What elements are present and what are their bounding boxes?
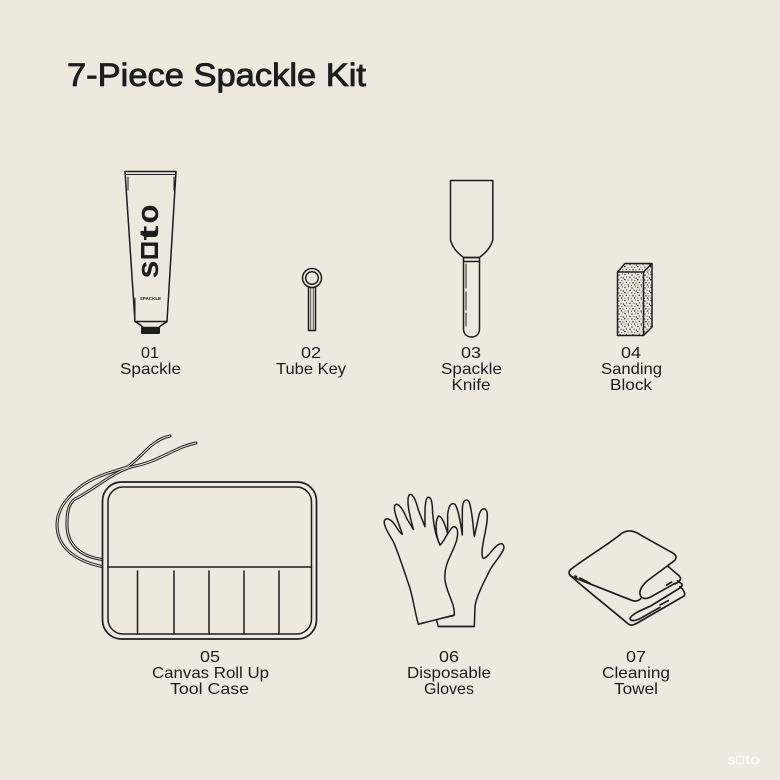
towel bottom layer [570, 575, 685, 625]
caption 05 [152, 649, 269, 698]
case pocket line [108, 566, 312, 568]
caption 05: Tool Case [170, 681, 249, 698]
case pocket dividers [138, 571, 279, 634]
caption 05: Canvas Roll Up [152, 665, 269, 682]
caption 05: 05 [200, 649, 220, 666]
caption 02: 02 [301, 345, 321, 362]
thumb of right glove [436, 516, 448, 545]
case body [102, 482, 316, 639]
caption 03: Spackle [441, 361, 502, 378]
caption 02 [276, 345, 346, 378]
caption 07 [602, 649, 670, 698]
caption 06: Disposable [407, 665, 491, 682]
caption 03: Knife [452, 377, 491, 394]
footer logo [728, 752, 760, 767]
caption 06: 06 [439, 649, 459, 666]
icon: spackle knife [450, 180, 493, 337]
icon: tool case [57, 436, 316, 639]
tube small label: SPACKLE [140, 296, 161, 301]
icon: sanding block [618, 264, 652, 336]
tube logo: t [134, 226, 164, 240]
item 01: spackle [120, 172, 181, 378]
towel top flap [570, 531, 676, 598]
left glove [384, 494, 458, 624]
item 03: spackle knife [441, 180, 502, 394]
tube logo: o [130, 204, 165, 224]
footer logo: to [745, 752, 760, 767]
item 04: sanding block [601, 264, 662, 394]
item 06: disposable gloves [384, 494, 504, 698]
caption 07: 07 [626, 649, 646, 666]
caption 06: Gloves [424, 681, 474, 698]
icon: gloves [384, 494, 504, 627]
caption 04: Sanding [601, 361, 662, 378]
tube logo: s [130, 260, 165, 278]
towel second layer [668, 567, 681, 584]
caption 01: Spackle [120, 361, 181, 378]
caption 01 [120, 345, 181, 378]
caption 07: Cleaning [602, 665, 670, 682]
icon: spackle tube [125, 172, 176, 334]
caption 04 [601, 345, 662, 394]
title: 7-Piece Spackle Kit [67, 57, 366, 93]
caption 01: 01 [141, 345, 159, 362]
caption 03: 03 [461, 345, 481, 362]
caption 03 [441, 345, 502, 394]
caption 04: 04 [621, 345, 641, 362]
item 05: canvas roll up tool case [57, 436, 316, 698]
tube logo [130, 204, 165, 278]
icon: tube key [302, 268, 322, 330]
case ties [57, 436, 196, 566]
icon: towel [569, 531, 685, 625]
caption 04: Block [610, 377, 653, 394]
caption 02: Tube Key [276, 361, 346, 378]
caption 06 [407, 649, 491, 698]
caption 07: Towel [614, 681, 658, 698]
footer logo: s [728, 752, 736, 767]
item 02: tube key [276, 268, 346, 378]
item 07: cleaning towel [569, 531, 685, 698]
towel lower fold [630, 589, 678, 621]
right glove [437, 500, 504, 627]
